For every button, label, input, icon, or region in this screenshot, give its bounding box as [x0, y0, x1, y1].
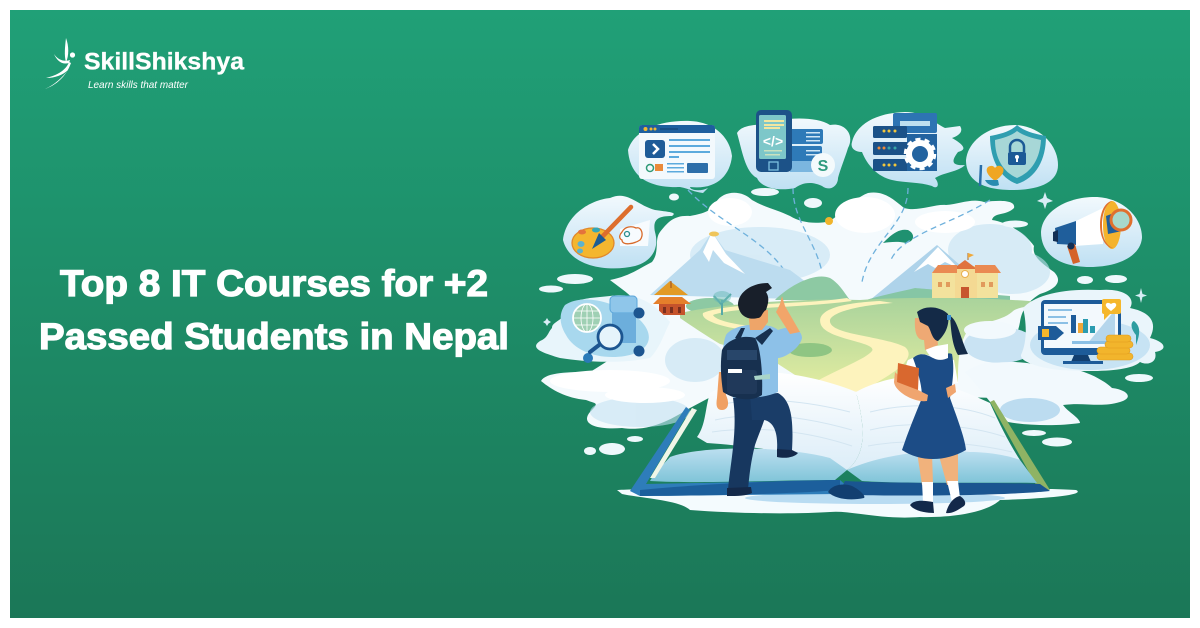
- code symbol: </>: [763, 133, 783, 149]
- girl shoes: [910, 496, 965, 513]
- boy head and hair: [738, 283, 772, 330]
- left page: [697, 373, 863, 470]
- left page block: [650, 448, 847, 482]
- badge: S: S: [818, 158, 829, 175]
- logo: SkillShikshya: [45, 38, 245, 91]
- bubble: web development browser window: [628, 121, 732, 193]
- boy shirt: [723, 325, 802, 398]
- girl pinafore dress: [902, 353, 966, 459]
- cloud shading: [590, 224, 1050, 427]
- bubble: UI design paint palette: [563, 196, 674, 268]
- bubble: cyber security shield: [966, 125, 1058, 190]
- girl legs: [917, 452, 958, 485]
- girl collar: [925, 344, 948, 360]
- page lines: [712, 400, 1012, 452]
- card tag: [1038, 326, 1064, 340]
- open book: [617, 373, 1078, 518]
- girl orange folder: [897, 363, 919, 390]
- icon: padlock: [1008, 140, 1026, 165]
- icon: heart: [987, 166, 1004, 181]
- right lower cloud: [965, 361, 1128, 425]
- icon: gear: [906, 140, 934, 168]
- logo tagline: Learn skills that matter: [88, 79, 188, 91]
- right page: [847, 377, 1020, 470]
- icon: globe: [573, 304, 601, 332]
- mountain: right peak with snow: [870, 245, 1000, 300]
- bubble: data analytics monitor: [1021, 290, 1164, 371]
- green land with winding road: [680, 277, 1040, 392]
- boy hand and arm: [717, 296, 800, 410]
- girl right hand: [946, 384, 956, 398]
- boy backpack: [721, 328, 773, 399]
- bubble: DevOps servers and gear: [852, 112, 965, 187]
- icon: leaping figure: [45, 38, 75, 89]
- distant hills: [686, 277, 1010, 314]
- bubble: data science globe and magnifier: [536, 295, 670, 363]
- school building: [932, 253, 1001, 298]
- icon: heart speech bubble: [1102, 299, 1121, 320]
- boy student: [717, 283, 802, 496]
- sparkles and star: [543, 192, 1147, 326]
- green gap in clouds: [883, 230, 913, 243]
- book cover: [630, 407, 848, 496]
- white design card: [620, 220, 650, 246]
- lower blue cloud beside girl: [964, 321, 1048, 382]
- girl head and hair: [915, 307, 968, 355]
- boy left leg: [728, 395, 770, 490]
- winding road: [805, 301, 909, 392]
- boy shoes: [727, 487, 752, 496]
- icon: chevron prompt: [645, 140, 665, 158]
- grass patch: [788, 343, 832, 357]
- puddle under book: [617, 488, 1078, 518]
- illustration: students on open book with course bubbles: [536, 110, 1164, 518]
- pagoda temple: [653, 281, 691, 315]
- girl arm: [894, 372, 928, 401]
- small cloud puffs: [539, 188, 1153, 455]
- mountain: left peak: [650, 232, 830, 300]
- icon: paint brush: [592, 207, 631, 249]
- girl socks: [922, 481, 960, 502]
- bubble: digital marketing megaphone: [1041, 197, 1142, 267]
- title: Top 8 IT Courses for +2: [60, 263, 488, 304]
- girl blouse sleeves: [906, 354, 958, 383]
- girl student: [894, 307, 968, 513]
- coin stack: [1097, 335, 1133, 360]
- title: [39, 263, 509, 357]
- title: Passed Students in Nepal: [39, 316, 509, 357]
- right page block: [847, 451, 1037, 483]
- logo wordmark: SkillShikshya: [84, 48, 245, 76]
- small tree: [713, 291, 731, 315]
- dashed connector lines: [688, 188, 990, 282]
- central cloud mass: [541, 192, 1058, 429]
- boy right leg: [750, 393, 792, 450]
- bubble: programming phone: [737, 110, 850, 189]
- icon: magnifier: [590, 325, 622, 352]
